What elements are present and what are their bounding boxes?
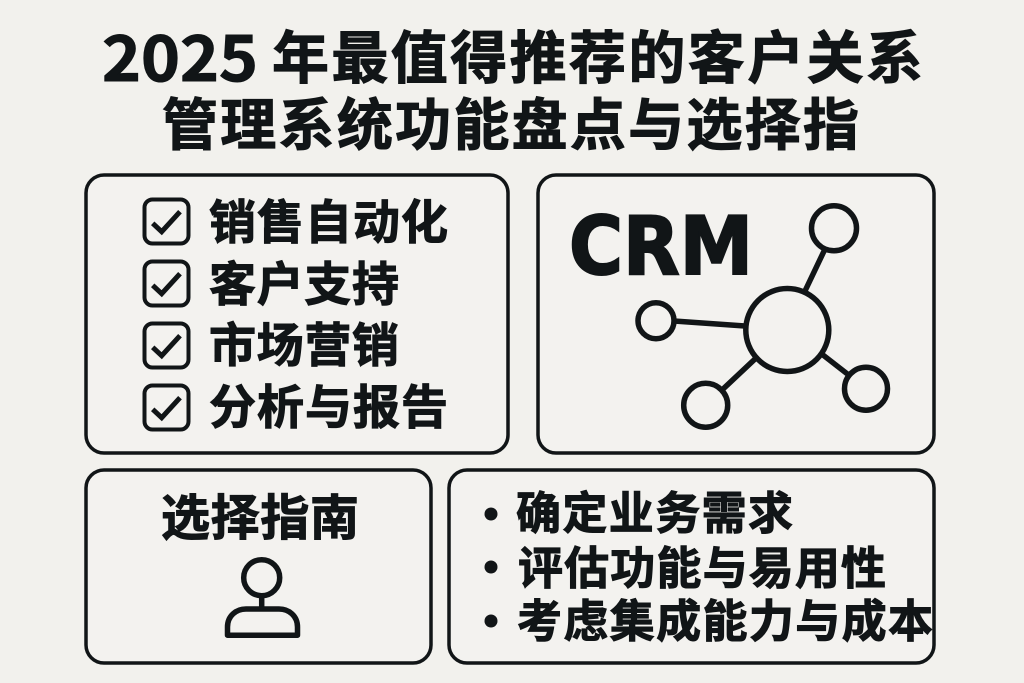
panel: CRM network xyxy=(538,175,934,453)
feature: analytics and reporting: 分析与报告 xyxy=(209,369,448,438)
title: 年最值得推荐的客户关系 xyxy=(272,13,923,95)
title xyxy=(102,9,923,162)
bullet: evaluate features: 评估功能与易用性 xyxy=(518,532,886,597)
icon: hub and spoke network xyxy=(638,206,888,427)
bullet: define needs: 确定业务需求 xyxy=(516,477,793,542)
bullet: integration and cost: 考虑集成能力与成本 xyxy=(517,585,933,650)
title: 2025 xyxy=(102,9,258,99)
panel: selection criteria xyxy=(449,470,934,663)
icon: checkbox customer support xyxy=(144,262,188,306)
feature: customer support: 客户支持 xyxy=(209,246,399,315)
icon: checkbox sales automation xyxy=(144,200,188,244)
icon: person xyxy=(228,560,298,635)
panel: features checklist xyxy=(86,175,508,453)
feature: sales automation: 销售自动化 xyxy=(209,184,448,253)
icon: checkbox marketing xyxy=(144,324,188,368)
feature: marketing: 市场营销 xyxy=(209,307,399,376)
CRM label: CRM xyxy=(569,200,753,293)
heading: selection guide: 选择指南 xyxy=(161,479,359,550)
panel: selection guide xyxy=(86,470,431,663)
icon: checkbox analytics xyxy=(144,386,188,430)
title: 管理系统功能盘点与选择指 xyxy=(162,81,859,162)
